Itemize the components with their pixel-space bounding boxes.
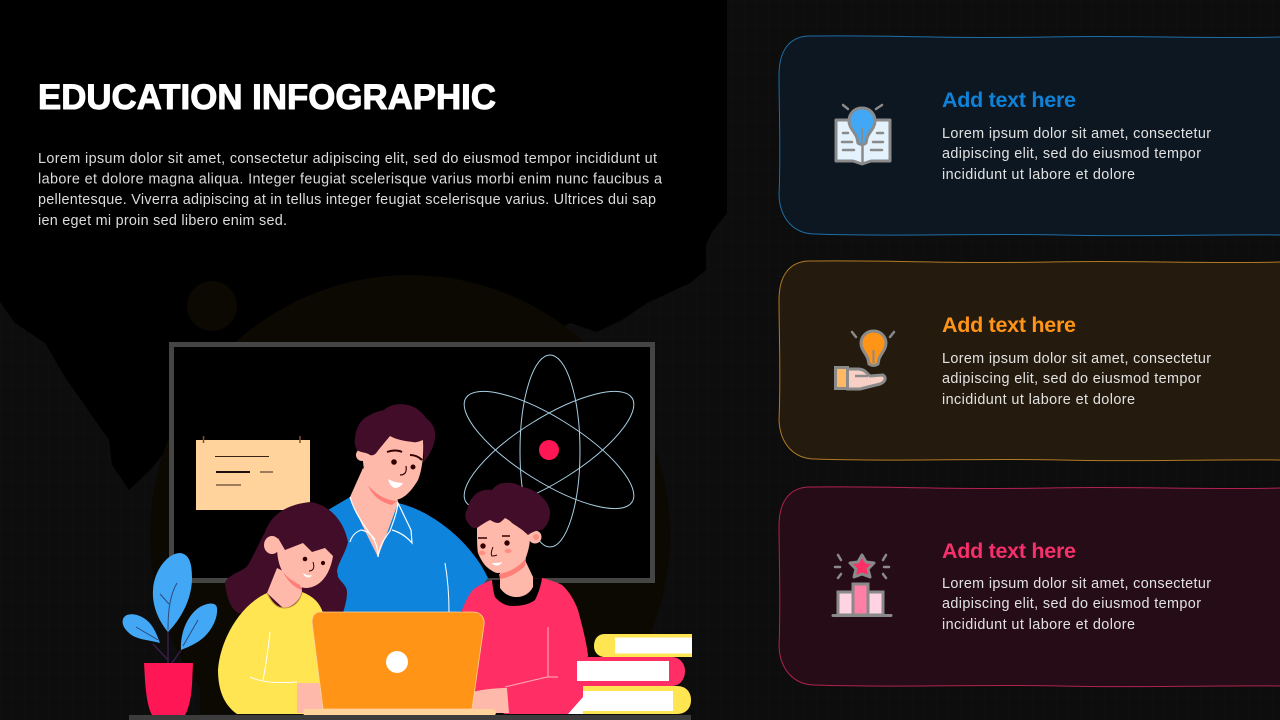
card text bbox=[942, 126, 1211, 183]
panel: blue card bbox=[779, 36, 1280, 236]
card text: Lorem ipsum dolor sit amet, consectetur bbox=[942, 126, 1211, 142]
card text: adipiscing elit, sed do eiusmod tempor bbox=[942, 596, 1201, 612]
girl student bbox=[218, 502, 348, 714]
icon: podium with star bbox=[833, 555, 891, 616]
card text bbox=[942, 351, 1211, 408]
card text: Lorem ipsum dolor sit amet, consectetur bbox=[942, 351, 1211, 367]
panel: pink card bbox=[779, 487, 1280, 687]
intro paragraph: Lorem ipsum dolor sit amet, consectetur adipiscing elit, sed do eiusmod tempor incididunt ut bbox=[38, 151, 657, 167]
card text: adipiscing elit, sed do eiusmod tempor bbox=[942, 371, 1201, 387]
card text: incididunt ut labore et dolore bbox=[942, 392, 1135, 408]
icon: hand holding lightbulb bbox=[836, 331, 894, 389]
card text bbox=[942, 576, 1211, 633]
card heading: Add text here bbox=[942, 313, 1076, 337]
card text: adipiscing elit, sed do eiusmod tempor bbox=[942, 146, 1201, 162]
plant bbox=[123, 553, 217, 715]
card text: Lorem ipsum dolor sit amet, consectetur bbox=[942, 576, 1211, 592]
card text: incididunt ut labore et dolore bbox=[942, 617, 1135, 633]
title: EDUCATION INFOGRAPHIC bbox=[38, 78, 496, 117]
table edge bbox=[129, 715, 691, 720]
blackboard bbox=[172, 344, 652, 580]
illustration: teacher and students bbox=[123, 275, 692, 720]
intro paragraph: ien eget mi proin sed libero enim sed. bbox=[38, 213, 287, 229]
teacher bbox=[328, 404, 488, 612]
stack of books bbox=[568, 634, 692, 714]
pinned note bbox=[196, 436, 310, 510]
boy student bbox=[462, 483, 588, 714]
icon: open book with lightbulb bbox=[836, 105, 890, 164]
card text: incididunt ut labore et dolore bbox=[942, 167, 1135, 183]
intro paragraph: pellentesque. Viverra adipiscing at in tellus integer feugiat scelerisque varius. Ultrices dui sap bbox=[38, 192, 656, 208]
intro paragraph bbox=[38, 151, 662, 229]
atom diagram bbox=[449, 355, 649, 547]
intro paragraph: labore et dolore magna aliqua. Integer feugiat scelerisque varius morbi enim nunc faucibus a bbox=[38, 172, 662, 188]
card heading: Add text here bbox=[942, 539, 1076, 563]
torn black backdrop bbox=[0, 0, 727, 490]
card heading: Add text here bbox=[942, 88, 1076, 112]
laptop bbox=[303, 612, 496, 716]
background circle bbox=[150, 275, 670, 714]
small background dot bbox=[187, 281, 237, 331]
panel: orange card bbox=[779, 261, 1280, 461]
